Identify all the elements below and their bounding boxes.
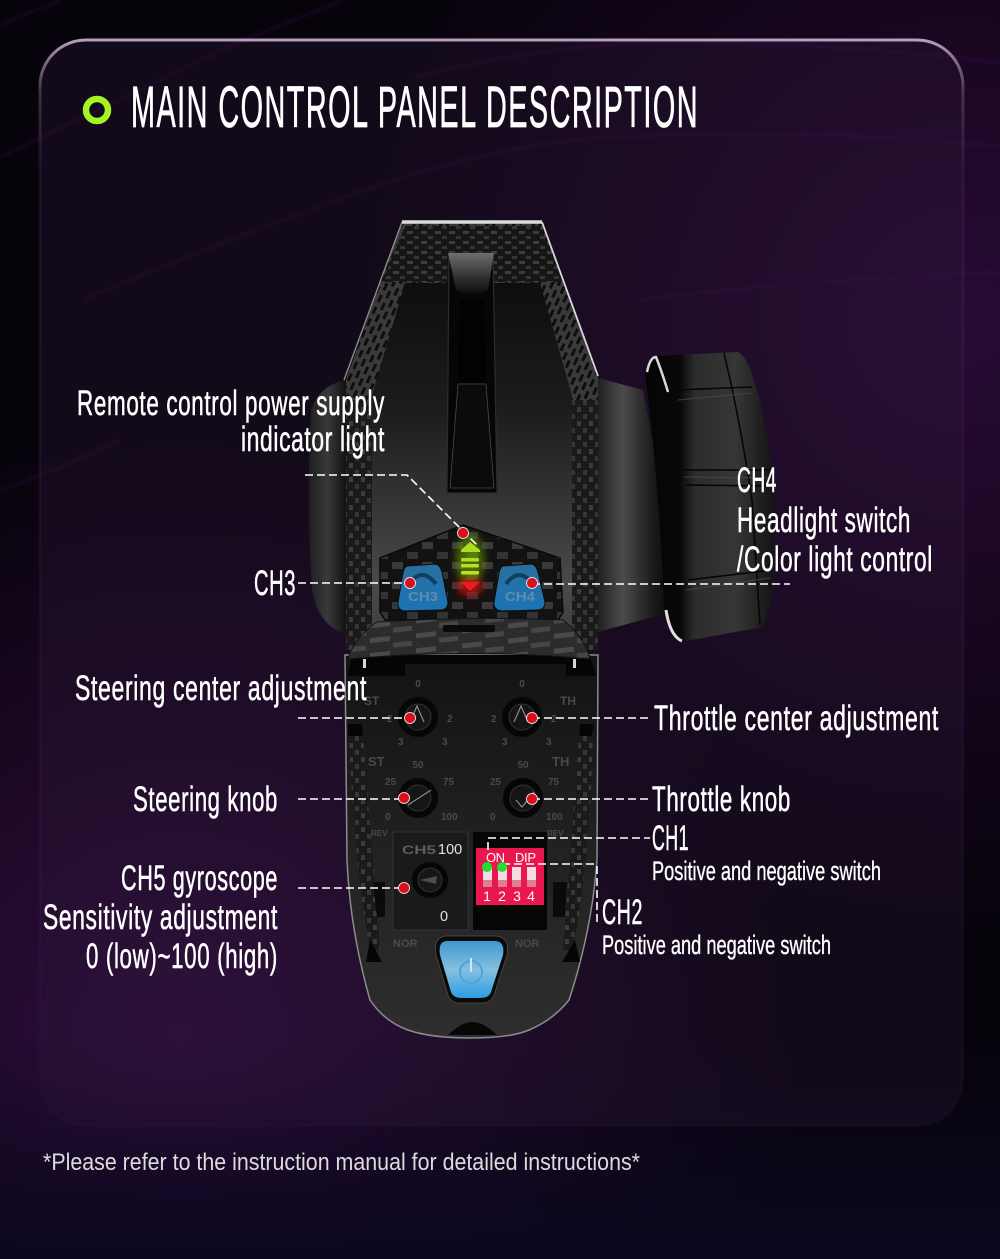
knob: steering: 25 — [385, 777, 397, 788]
shell highlight edge — [344, 222, 598, 380]
power button — [435, 936, 508, 1003]
callout: CH5 gyroscope: 0 (low)~100 (high) — [86, 937, 278, 976]
button: CH3 — [398, 564, 448, 611]
hinge pins — [363, 659, 576, 668]
callout: CH2: Positive and negative switch — [602, 930, 831, 960]
DIP switch: 3 — [513, 888, 521, 904]
callout: steering knob: Steering knob — [133, 780, 278, 819]
callout: CH1: Positive and negative switch — [652, 856, 881, 886]
callout: power indicator light — [77, 384, 478, 546]
knob: steering: ST — [368, 754, 385, 769]
DIP switch: DIP — [515, 850, 536, 865]
LED indicators — [456, 534, 484, 596]
knob: throttle: 50 — [517, 760, 529, 771]
callout: power indicator light: Remote control power supply — [77, 384, 385, 423]
knob: throttle: 0 — [490, 812, 496, 823]
steering wheel knob — [645, 352, 775, 642]
top carbon band — [382, 226, 564, 282]
inner face — [372, 283, 572, 645]
knob: steering center: 3 — [442, 737, 448, 748]
knob: throttle center: 3 — [502, 737, 508, 748]
callout: CH3: CH3 — [254, 564, 296, 603]
bottom notch — [448, 1022, 497, 1035]
callout: CH2 — [497, 862, 831, 960]
footnote: *Please refer to the instruction manual for detailed instructions* — [43, 1149, 640, 1176]
lower body — [345, 655, 598, 1038]
callout: throttle knob: Throttle knob — [652, 780, 791, 819]
CH5 gyroscope box: 100 — [438, 842, 462, 858]
CH5 gyroscope box: CH5 — [402, 843, 436, 857]
knob: throttle center: TH — [560, 694, 576, 708]
knob: throttle: 25 — [490, 777, 502, 788]
knob: throttle: 75 — [548, 777, 560, 788]
callout: steering center adjustment: Steering center adjustment — [75, 669, 367, 708]
callout: CH4 — [526, 461, 933, 588]
carbon hex plate — [380, 525, 563, 620]
callout: steering center adjustment — [75, 669, 416, 724]
left side bulge — [309, 380, 346, 635]
knob: steering: 0 — [385, 812, 391, 823]
knob: steering — [368, 754, 458, 838]
callout: CH5 gyroscope — [43, 859, 410, 976]
DIP switch — [473, 832, 547, 930]
callout: CH1: CH1 — [652, 819, 689, 858]
DIP switch: 2 — [498, 888, 506, 904]
CH5 gyroscope box: 0 — [440, 909, 448, 925]
side carbon strips — [349, 724, 380, 950]
callout: CH5 gyroscope: CH5 gyroscope — [121, 859, 278, 898]
right side bulge — [598, 378, 668, 632]
knob: steering center: 2 — [387, 714, 393, 725]
NOR labels: NOR — [393, 938, 418, 950]
callout: CH5 gyroscope: Sensitivity adjustment — [43, 898, 278, 937]
callout: throttle knob — [526, 780, 791, 819]
knob: steering: REV — [371, 829, 388, 838]
callout: power indicator light: indicator light — [241, 420, 385, 459]
knob: throttle center — [491, 679, 576, 748]
knob: throttle center: 3 — [546, 737, 552, 748]
outer shell carbon — [346, 221, 598, 650]
knob: steering center: 3 — [398, 737, 404, 748]
knob: steering: 75 — [443, 777, 455, 788]
NOR labels — [393, 938, 540, 950]
CH5 gyroscope box — [393, 832, 468, 930]
centre slider — [447, 253, 497, 493]
knob: steering: 50 — [412, 760, 424, 771]
icon: green ring bullet — [86, 99, 108, 121]
knob: throttle: TH — [552, 754, 569, 769]
DIP switch: ON — [486, 850, 505, 865]
knob: steering: 100 — [441, 812, 458, 823]
knob: steering center: ST — [364, 694, 380, 708]
knob: steering center: 2 — [447, 714, 453, 725]
callout: CH4: CH4 — [737, 461, 777, 500]
callout: CH1 — [482, 819, 881, 886]
knob: throttle: 100 — [546, 812, 563, 823]
callout: CH4: Headlight switch — [737, 501, 911, 540]
button: CH4 — [494, 564, 545, 611]
carbon hood — [348, 618, 590, 659]
NOR labels: NOR — [515, 938, 540, 950]
button: CH4: CH4 — [505, 589, 536, 604]
knob: steering center: 0 — [415, 679, 421, 690]
knob: throttle — [490, 754, 569, 838]
button: CH3: CH3 — [408, 589, 438, 604]
callout: throttle center adjustment — [526, 699, 939, 738]
knob: steering center — [364, 679, 453, 748]
product: remote control head — [309, 221, 775, 1038]
callout: CH3 — [254, 564, 416, 603]
DIP switch: 1 — [483, 888, 491, 904]
knob: throttle: REV — [547, 829, 564, 838]
knob: throttle center: 2 — [491, 714, 497, 725]
opening under hood — [348, 655, 596, 676]
callout: CH2: CH2 — [602, 893, 643, 932]
upper shell lozenge carbon — [346, 221, 598, 400]
knob: throttle center: 2 — [551, 714, 557, 725]
panel: glass card — [40, 40, 963, 1126]
knob: throttle center: 0 — [519, 679, 525, 690]
DIP switch: 4 — [527, 888, 535, 904]
